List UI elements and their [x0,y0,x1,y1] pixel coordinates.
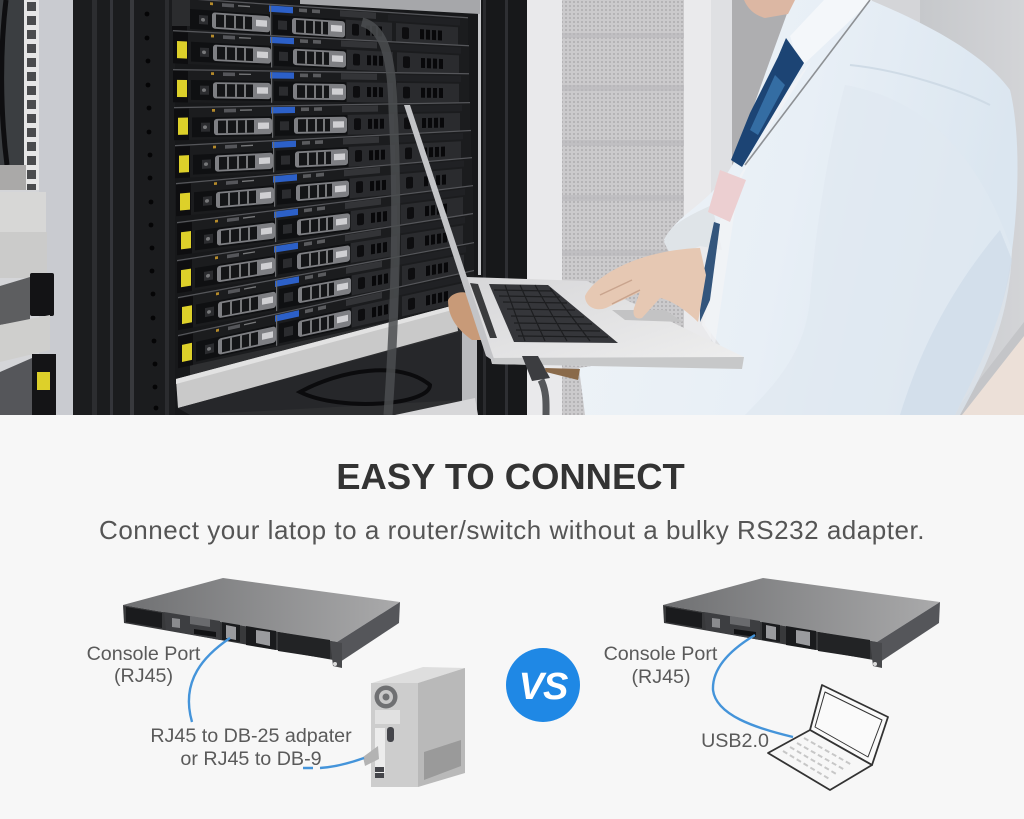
diagram: direct usb [604,578,940,790]
left hand [448,292,486,340]
server unit right [663,578,940,668]
screen edge [404,105,495,362]
db connector [363,746,379,766]
diagram: console via adapter [87,578,465,787]
right hand [585,248,706,322]
rack uprights with mounting holes [73,0,177,415]
versus badge: VS [519,666,568,708]
adapter label: RJ45 to DB-25 adpater [150,725,352,747]
left wall, cable duct and stacked units [0,0,84,415]
console port label: Console Port [87,643,201,665]
head [744,0,795,18]
usb plug [522,356,550,381]
back wall and door panels [0,0,1024,415]
tower computer [371,667,465,787]
server rows [172,0,474,368]
shirt [579,0,1018,415]
shelf under servers [176,305,478,415]
keyboard keys [494,285,608,341]
rj45 label: (RJ45) [631,666,691,688]
keyboard [489,284,618,343]
laptop [404,105,744,415]
usb cable [541,380,546,415]
usb console cable [713,635,793,737]
laptop line icon [768,685,888,790]
heading: EASY TO CONNECT [336,456,685,497]
id badge [708,170,746,222]
adapter cable [189,638,230,722]
trackpad [612,310,683,322]
finger creases [600,280,640,304]
subheading: Connect your latop to a router/switch without a bulky RS232 adapter. [99,515,925,545]
adapter label line two: or RJ45 to DB-9 [180,748,322,770]
server unit left [123,578,400,668]
versus badge [506,648,580,722]
photo: technician with laptop at server rack [0,0,1024,415]
flat ribbon cable [362,22,396,415]
rj45 label: (RJ45) [114,665,173,687]
tie [700,38,804,322]
console port label: Console Port [604,643,718,665]
serial cable [303,758,364,768]
rack interior [175,0,527,415]
usb label: USB2.0 [701,730,769,752]
sleeve cuff under laptop [545,368,580,380]
